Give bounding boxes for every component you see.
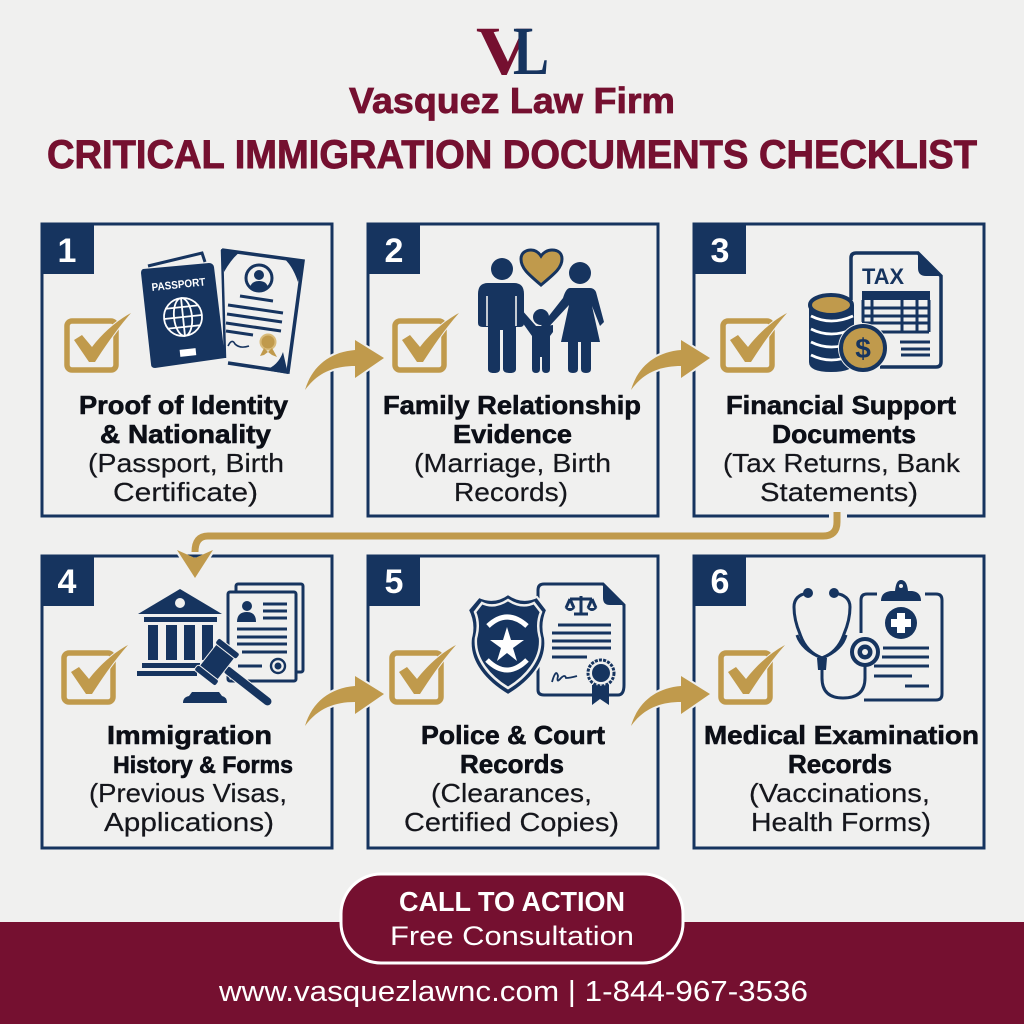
description 5: (Clearances,: [431, 778, 592, 808]
description 1 line 2: Certificate): [113, 477, 258, 507]
checkbox 2: [395, 313, 459, 370]
contact line: www.vasquezlawnc.com | 1-844-967-3536: [218, 976, 808, 1008]
arrow: 1 to 2: [305, 340, 384, 390]
description 3: (Tax Returns, Bank: [723, 448, 961, 478]
icon: passport and birth certificate: PASSPORT: [151, 276, 206, 294]
panel 1: proof of identity: 1: [58, 232, 76, 270]
icon: courthouse, gavel and forms: [137, 584, 303, 720]
description 4: (Previous Visas,: [89, 778, 287, 808]
call to action pill: [341, 874, 683, 963]
heading 1 line 2: & Nationality: [100, 419, 272, 449]
heading 4: Immigration: [107, 720, 272, 750]
panel 3: financial support: [693, 223, 984, 516]
heading 2: Family Relationship: [383, 390, 641, 420]
logo: VL monogram: [476, 13, 549, 89]
checkbox 6: [721, 645, 785, 702]
heading 6: Medical Examination: [704, 720, 979, 750]
description 6: (Vaccinations,: [749, 778, 930, 808]
arrow: 4 to 5: [305, 676, 384, 726]
icon: passport and birth certificate: [141, 249, 304, 374]
icon: stethoscope and clipboard: [794, 580, 942, 700]
checkbox 1: [67, 313, 131, 370]
call to action pill: Free Consultation: [390, 921, 634, 951]
heading 3: Financial Support: [726, 390, 956, 420]
icon: police badge and certified record: [468, 584, 624, 705]
arrow: 5 to 6: [631, 676, 710, 726]
panel 4: immigration history: [41, 555, 332, 848]
logo: VL monogram: V: [476, 13, 532, 89]
panel 4: immigration history: 4: [58, 563, 77, 601]
description 5 line 2: Certified Copies): [404, 807, 619, 837]
icon: tax form and coins: [809, 253, 941, 373]
logo: VL monogram: L: [513, 13, 549, 89]
heading 6 line 2: Records: [788, 749, 892, 779]
heading 3 line 2: Documents: [772, 419, 916, 449]
heading 5 line 2: Records: [460, 749, 564, 779]
panel 6: medical examination: [693, 555, 984, 848]
checkbox 4: [64, 645, 128, 702]
panel 5: police and court: 5: [385, 563, 403, 601]
description 6 line 2: Health Forms): [751, 807, 931, 837]
description 2: (Marriage, Birth: [414, 448, 611, 478]
description 3 line 2: Statements): [760, 477, 918, 507]
call to action pill: CALL TO ACTION: [399, 886, 625, 917]
panel 2: family relationship: [367, 223, 658, 516]
description 1: (Passport, Birth: [88, 448, 284, 478]
heading 1: Proof of Identity: [79, 390, 289, 420]
heading 5: Police & Court: [421, 720, 605, 750]
panel 5: police and court: [367, 555, 658, 848]
firm name: Vasquez Law Firm: [349, 80, 675, 121]
icon: family with heart: [478, 250, 604, 373]
panel 6: medical examination: 6: [711, 563, 729, 601]
icon: tax form and coins: $: [855, 333, 871, 364]
checkbox 5: [392, 645, 456, 702]
panel 1: proof of identity: [41, 223, 332, 516]
heading 4 line 2: History & Forms: [113, 752, 293, 779]
icon: tax form and coins: TAX: [862, 264, 904, 289]
footer band: [0, 922, 1024, 1024]
description 2 line 2: Records): [454, 477, 568, 507]
arrow: 2 to 3: [631, 340, 710, 390]
panel 3: financial support: 3: [711, 232, 729, 270]
title: CRITICAL IMMIGRATION DOCUMENTS CHECKLIST: [47, 133, 977, 177]
arrow: 3 to 4: [174, 512, 847, 580]
checkbox 3: [723, 313, 787, 370]
heading 2 line 2: Evidence: [453, 419, 572, 449]
panel 2: family relationship: 2: [385, 232, 403, 270]
description 4 line 2: Applications): [104, 807, 274, 837]
